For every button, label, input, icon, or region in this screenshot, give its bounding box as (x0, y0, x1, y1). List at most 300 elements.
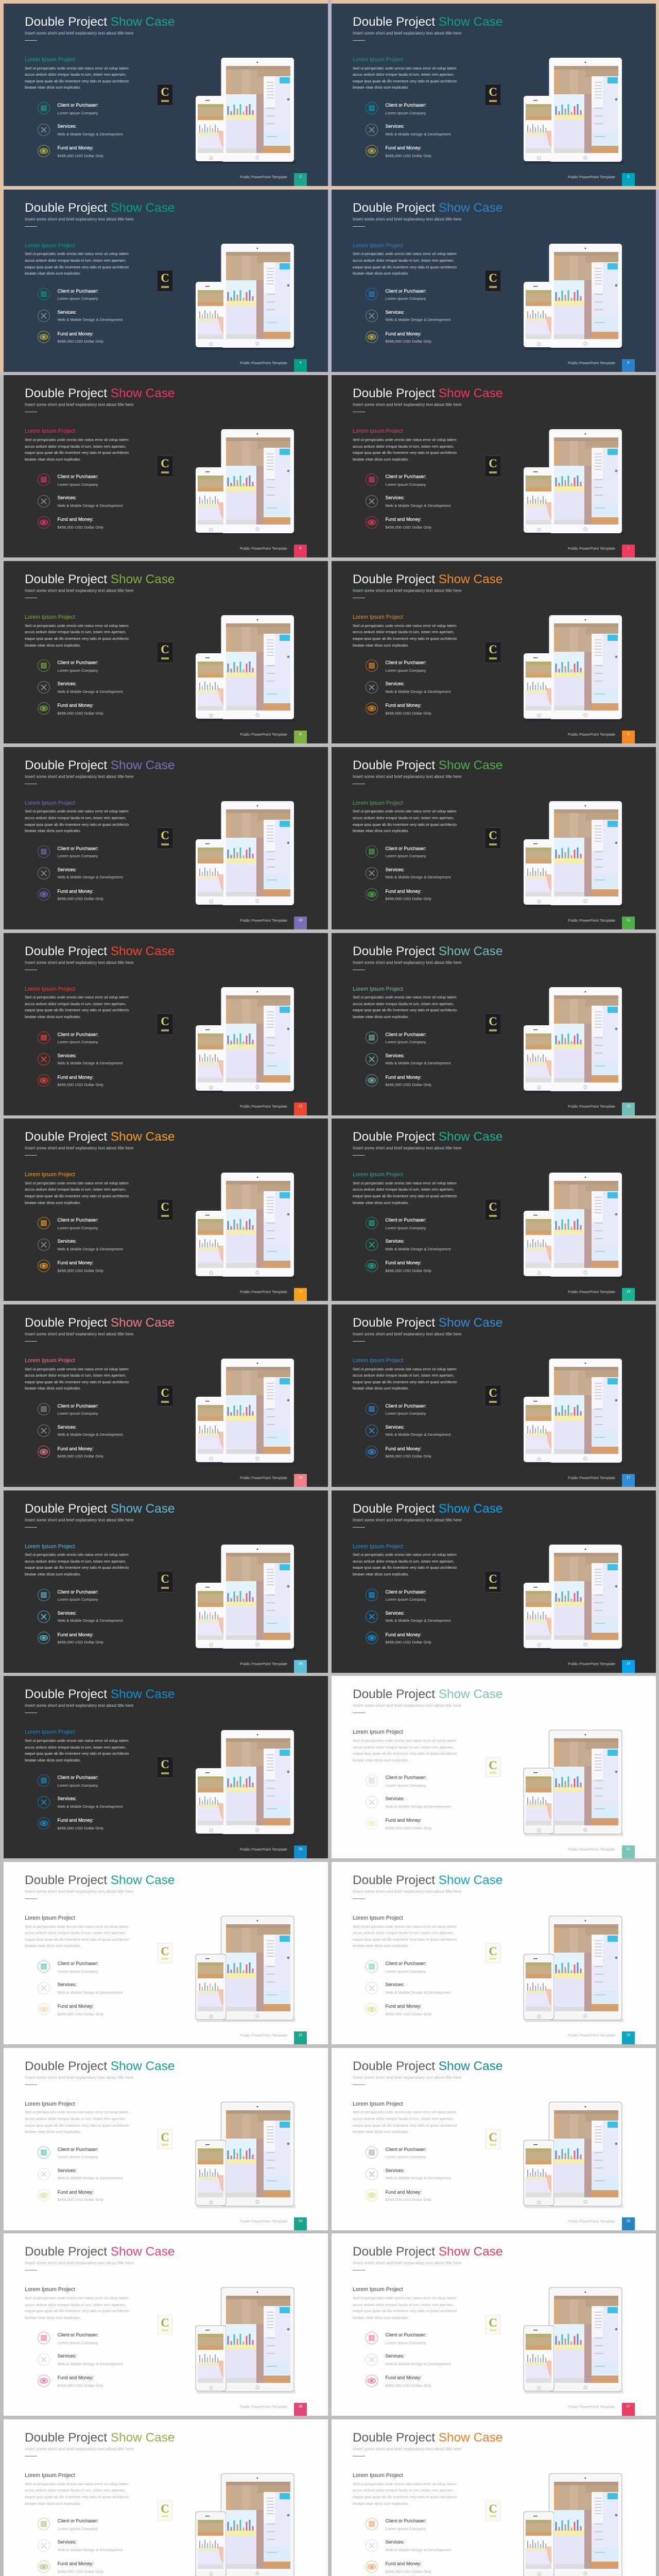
client text: Client or Purchaser: (385, 289, 426, 294)
footer: Public PowerPoint Template (240, 1662, 287, 1666)
client text: Client or Purchaser: (58, 289, 98, 294)
footer: Public PowerPoint Template (240, 1476, 287, 1480)
icon: fund (37, 888, 50, 901)
logo (485, 1199, 500, 1221)
icon: client (365, 1402, 378, 1416)
icon: services (365, 1795, 378, 1809)
text block (25, 623, 129, 649)
services text (58, 1981, 123, 1996)
text block: eaque ipsa quae ab illo inventore very tatis et quasi architecto (353, 450, 457, 455)
client text: Lorem Ipsum Company (385, 2155, 426, 2159)
client text: Lorem Ipsum Company (58, 668, 98, 673)
services text (58, 1609, 123, 1625)
text block: accus antium dolor emque lauda nt ium, totam rem aperiam, (25, 1373, 126, 1378)
device mockup (518, 798, 627, 911)
panel: slide 16 (3, 1304, 328, 1487)
device mockup (190, 1541, 299, 1654)
services text (58, 2167, 123, 2182)
icon: client (37, 1030, 50, 1044)
text block (25, 1366, 129, 1392)
services text: Services: (385, 1425, 405, 1430)
services text (385, 124, 451, 136)
device mockup (190, 2284, 299, 2397)
text block (25, 437, 129, 462)
logo (485, 2315, 500, 2334)
footer: Public PowerPoint Template (240, 546, 287, 551)
services text: Services: (58, 681, 77, 686)
device mockup (518, 1541, 627, 1654)
services text (58, 1423, 123, 1439)
icon: client (365, 1030, 378, 1044)
services text (58, 1052, 123, 1067)
page number: 23 (627, 2033, 630, 2037)
panel: slide 27 (332, 2233, 656, 2416)
text block (25, 1180, 129, 1206)
title: Double Project Show Case (353, 1687, 502, 1701)
services text (385, 1238, 450, 1253)
page number (622, 173, 635, 186)
icon: fund (365, 702, 378, 715)
services text: Web & Mobile Design & Development (385, 1618, 450, 1623)
client text: Client or Purchaser: (58, 660, 98, 665)
logo (158, 1943, 172, 1963)
fund text: $456,000 USD Dollar Only (385, 525, 431, 530)
icon: client (366, 102, 378, 114)
fund text: Fund and Money: (58, 1818, 94, 1823)
services text: Services: (58, 1425, 77, 1430)
services text: Services: (385, 495, 405, 500)
panel: slide 28 (3, 2419, 328, 2576)
fund text: Fund and Money: (385, 1446, 422, 1451)
services text: Web & Mobile Design & Development (58, 1618, 123, 1623)
fund text: $456,000 USD Dollar Only (385, 711, 431, 716)
page number (622, 2217, 635, 2230)
page number (622, 2031, 635, 2044)
services text: Services: (385, 1796, 405, 1801)
text block: beatae vitae dicta sunt explicabo. (25, 2129, 81, 2134)
services text (58, 1238, 123, 1253)
icon: client (38, 102, 50, 114)
title: Double Project Show Case (353, 2245, 502, 2259)
services text: Web & Mobile Design & Development (58, 132, 123, 136)
logo: C (489, 2316, 497, 2329)
services text: Web & Mobile Design & Development (58, 875, 123, 879)
icon: client (365, 2517, 378, 2531)
panel: slide 14 (3, 1118, 328, 1301)
fund text: Fund and Money: (385, 2004, 422, 2009)
page number (294, 1474, 307, 1487)
fund text: $456,000 USD Dollar Only (385, 2011, 431, 2016)
text block (353, 1924, 457, 1950)
subtitle: Insert some short and brief explanatory text about title here (25, 960, 133, 964)
text block: eaque ipsa quae ab illo inventore very tatis et quasi architecto (25, 2123, 129, 2128)
client text: Lorem Ipsum Company (58, 1411, 98, 1416)
text block (353, 2109, 457, 2136)
subtitle: Insert some short and brief explanatory text about title here (353, 960, 461, 964)
services text (58, 2538, 123, 2554)
text block: eaque ipsa quae ab illo inventore very tatis et quasi architecto (353, 1380, 457, 1384)
text block (25, 2481, 129, 2507)
text block: beatae vitae dicta sunt explicabo. (353, 2129, 409, 2134)
text block (25, 2109, 129, 2136)
services text: Web & Mobile Design & Development (58, 317, 123, 322)
fund text: $456,000 USD Dollar Only (385, 1454, 431, 1459)
text block: eaque ipsa quae ab illo inventore very tatis et quasi architecto (353, 1751, 457, 1756)
fund text: $456,000 USD Dollar Only (385, 2569, 431, 2574)
logo: C (489, 1200, 497, 1213)
subtitle: Insert some short and brief explanatory text about title here (25, 2075, 133, 2080)
heading: Lorem Ipsum Project (353, 428, 403, 434)
text block: Sed ut perspiciatis unde omnis iste natus error sit volup tatem (353, 1181, 457, 1185)
title: Double Project Show Case (353, 944, 502, 958)
icon: client (366, 288, 378, 300)
logo: C (489, 86, 497, 98)
client text: Lorem Ipsum Company (58, 854, 98, 858)
fund text: $456,000 USD Dollar Only (58, 2383, 103, 2388)
client text: Lorem Ipsum Company (385, 668, 426, 673)
page number: 9 (628, 733, 629, 736)
fund text: Fund and Money: (58, 2561, 94, 2566)
client text: Lorem Ipsum Company (58, 2527, 98, 2531)
services text (385, 680, 450, 696)
page number (294, 545, 307, 557)
page number: 16 (299, 1476, 302, 1480)
fund text: $456,000 USD Dollar Only (58, 2197, 103, 2202)
device mockup (190, 2470, 299, 2576)
text block (353, 1180, 457, 1206)
icon: fund (38, 331, 50, 343)
page number: 11 (627, 919, 630, 922)
subtitle: Insert some short and brief explanatory text about title here (25, 2261, 133, 2265)
services text: Services: (385, 2539, 405, 2545)
logo (158, 827, 172, 849)
panel: slide 24 (3, 2048, 328, 2230)
logo (485, 1943, 500, 1963)
icon: services (37, 1052, 50, 1065)
text block: accus antium dolor emque lauda nt ium, totam rem aperiam, (25, 816, 126, 820)
page number (294, 917, 307, 929)
client text (385, 1774, 426, 1789)
title: Double Project Show Case (25, 944, 175, 958)
services text: Web & Mobile Design & Development (385, 2548, 450, 2552)
page number: 21 (627, 1848, 630, 1851)
text block: beatae vitae dicta sunt explicabo. (353, 1014, 409, 1019)
title: Double Project Show Case (353, 1502, 502, 1516)
client text: Client or Purchaser: (58, 1217, 98, 1223)
text block: accus antium dolor emque lauda nt ium, totam rem aperiam, (353, 1745, 454, 1750)
heading: Lorem Ipsum Project (353, 1915, 403, 1921)
text block (353, 623, 457, 649)
heading: Lorem Ipsum Project (25, 57, 75, 63)
fund text: Fund and Money: (385, 2561, 422, 2566)
services text: Web & Mobile Design & Development (58, 1061, 123, 1065)
services text: Services: (385, 124, 405, 129)
icon: services (365, 1238, 378, 1251)
client text: Client or Purchaser: (58, 846, 98, 851)
client text: Lorem Ipsum Company (58, 1226, 98, 1230)
text block: accus antium dolor emque lauda nt ium, totam rem aperiam, (353, 816, 454, 820)
logo (485, 1757, 500, 1777)
device mockup (518, 2098, 627, 2212)
text block: Sed ut perspiciatis unde omnis iste natus error sit volup tatem (25, 2296, 129, 2300)
client text: Lorem Ipsum Company (385, 1226, 426, 1230)
text block (25, 994, 129, 1021)
text block: beatae vitae dicta sunt explicabo. (353, 2315, 409, 2320)
logo: C (161, 2131, 169, 2144)
fund text: $456,000 USD Dollar Only (385, 1640, 431, 1645)
client text: Client or Purchaser: (385, 1961, 426, 1966)
page number (294, 1845, 307, 1858)
services text: Services: (58, 867, 77, 872)
text block: accus antium dolor emque lauda nt ium, totam rem aperiam, (25, 2302, 126, 2307)
icon: client (37, 1960, 50, 1973)
text block (25, 1552, 129, 1578)
fund text: Fund and Money: (58, 1632, 94, 1637)
client text (58, 1774, 98, 1789)
text block: eaque ipsa quae ab illo inventore very tatis et quasi architecto (353, 1194, 457, 1198)
fund text (58, 1817, 103, 1832)
text block: beatae vitae dicta sunt explicabo. (353, 1758, 409, 1762)
icon: fund (37, 2003, 50, 2016)
footer: Public PowerPoint Template (568, 2219, 615, 2224)
fund text: $456,000 USD Dollar Only (58, 525, 103, 530)
footer: Public PowerPoint Template (240, 1290, 287, 1294)
client text: Lorem Ipsum Company (58, 2155, 98, 2159)
services text (58, 124, 123, 136)
client text: Client or Purchaser: (58, 1403, 98, 1409)
client text: Client or Purchaser: (385, 2147, 426, 2152)
text block (353, 437, 457, 463)
fund text (385, 145, 431, 158)
client text: Client or Purchaser: (385, 846, 426, 851)
subtitle: Insert some short and brief explanatory text about title here (353, 2261, 461, 2265)
panel: slide 12 (3, 933, 328, 1115)
logo (158, 1013, 172, 1035)
text block: eaque ipsa quae ab illo inventore very tatis et quasi architecto (25, 2495, 129, 2499)
panel: slide 23 (332, 1862, 656, 2044)
services text (58, 494, 123, 510)
device mockup (518, 2470, 627, 2576)
fund text: $456,000 USD Dollar Only (58, 339, 103, 344)
page number: 18 (299, 1662, 302, 1666)
device mockup (190, 612, 299, 725)
heading: Lorem Ipsum Project (353, 986, 403, 992)
icon: client (37, 1216, 50, 1230)
text block: Sed ut perspiciatis unde omnis iste natus error sit volup tatem (25, 1924, 129, 1929)
services text: Services: (58, 1239, 77, 1244)
client text: Lorem Ipsum Company (58, 110, 98, 115)
footer: Public PowerPoint Template (568, 1290, 615, 1294)
text block: eaque ipsa quae ab illo inventore very tatis et quasi architecto (353, 1937, 457, 1942)
icon: client (365, 845, 378, 858)
fund text: Fund and Money: (58, 331, 94, 336)
text block: beatae vitae dicta sunt explicabo. (353, 271, 409, 276)
client text (385, 473, 426, 488)
client text: Client or Purchaser: (385, 474, 426, 479)
footer: Public PowerPoint Template (568, 175, 615, 179)
icon: services (37, 2167, 50, 2181)
heading: Lorem Ipsum Project (25, 2472, 75, 2479)
icon: fund (366, 331, 378, 343)
icon: client (37, 659, 50, 672)
text block: accus antium dolor emque lauda nt ium, totam rem aperiam, (353, 1187, 454, 1192)
icon: fund (365, 888, 378, 901)
logo (158, 2315, 172, 2334)
icon: services (37, 867, 50, 880)
panel: slide 9 (332, 561, 656, 743)
text block: beatae vitae dicta sunt explicabo. (25, 1572, 81, 1577)
icon: client (37, 2331, 50, 2345)
page number: 27 (627, 2405, 630, 2409)
fund text (58, 516, 103, 531)
text block: eaque ipsa quae ab illo inventore very tatis et quasi architecto (25, 1937, 129, 1942)
icon: fund (365, 516, 378, 529)
services text (385, 866, 450, 882)
device mockup (518, 1355, 627, 1468)
logo (158, 641, 172, 663)
services text: Services: (385, 2353, 405, 2359)
fund text (385, 1817, 431, 1832)
fund text: Fund and Money: (58, 889, 94, 894)
footer: Public PowerPoint Template (240, 2219, 287, 2224)
subtitle: Insert some short and brief explanatory text about title here (353, 217, 461, 222)
client text: Client or Purchaser: (58, 1961, 98, 1966)
text block: eaque ipsa quae ab illo inventore very tatis et quasi architecto (25, 822, 129, 827)
text block: Sed ut perspiciatis unde omnis iste natus error sit volup tatem (25, 2482, 129, 2486)
client text (58, 2517, 98, 2533)
logo: C (489, 2502, 497, 2515)
client text: Lorem Ipsum Company (385, 1969, 426, 1973)
services text: Web & Mobile Design & Development (385, 503, 450, 508)
text block: eaque ipsa quae ab illo inventore very tatis et quasi architecto (353, 822, 457, 827)
heading: Lorem Ipsum Project (353, 243, 403, 249)
text block: Sed ut perspiciatis unde omnis iste natus error sit volup tatem (353, 1367, 457, 1371)
text block: eaque ipsa quae ab illo inventore very tatis et quasi architecto (353, 265, 457, 269)
text block (353, 808, 457, 835)
device mockup (524, 58, 623, 164)
logo: C (161, 643, 169, 656)
logo (485, 455, 500, 477)
text block: Sed ut perspiciatis unde omnis iste natus error sit volup tatem (353, 1738, 457, 1743)
client text: Lorem Ipsum Company (385, 2341, 426, 2345)
fund text (58, 1631, 103, 1647)
icon: services (365, 1981, 378, 1995)
text block: Sed ut perspiciatis unde omnis iste natus error sit volup tatem (25, 66, 129, 71)
text block: accus antium dolor emque lauda nt ium, totam rem aperiam, (25, 630, 126, 634)
fund text (58, 2374, 103, 2389)
services text (385, 2352, 450, 2368)
icon: client (37, 2146, 50, 2159)
fund text: $456,000 USD Dollar Only (58, 2569, 103, 2574)
icon: fund (365, 1817, 378, 1830)
text block (353, 994, 457, 1021)
heading: Lorem Ipsum Project (25, 428, 75, 434)
subtitle: Insert some short and brief explanatory text about title here (25, 1703, 133, 1708)
heading: Lorem Ipsum Project (25, 1544, 75, 1550)
text block: accus antium dolor emque lauda nt ium, totam rem aperiam, (353, 444, 454, 449)
logo: C (161, 2502, 169, 2515)
text block: accus antium dolor emque lauda nt ium, totam rem aperiam, (25, 1930, 126, 1935)
services text: Services: (58, 2539, 77, 2545)
page number (622, 1103, 635, 1115)
icon: fund (37, 1259, 50, 1273)
client text (385, 2146, 426, 2161)
client text: Lorem Ipsum Company (385, 1597, 426, 1602)
title: Double Project Show Case (353, 386, 502, 400)
title: Double Project Show Case (353, 1130, 502, 1144)
title: Double Project Show Case (25, 2059, 175, 2073)
icon: services (37, 681, 50, 694)
panel: slide 29 (332, 2419, 656, 2576)
icon: services (365, 1052, 378, 1065)
page number: 6 (300, 547, 301, 550)
icon: fund (37, 1631, 50, 1645)
text block: accus antium dolor emque lauda nt ium, totam rem aperiam, (25, 258, 126, 263)
fund text (385, 2374, 431, 2389)
text block: Sed ut perspiciatis unde omnis iste natus error sit volup tatem (25, 437, 129, 442)
fund text: $456,000 USD Dollar Only (58, 154, 103, 158)
client text: Client or Purchaser: (58, 1589, 98, 1595)
icon: services (37, 1981, 50, 1995)
client text: Lorem Ipsum Company (385, 482, 426, 487)
logo: C (161, 1945, 169, 1958)
icon: services (365, 495, 378, 508)
text block (25, 808, 129, 835)
services text: Web & Mobile Design & Development (58, 689, 123, 694)
page number: 22 (299, 2033, 302, 2037)
icon: fund (365, 1074, 378, 1087)
fund text: $456,000 USD Dollar Only (385, 896, 431, 901)
text block: beatae vitae dicta sunt explicabo. (25, 1386, 81, 1391)
heading: Lorem Ipsum Project (25, 1729, 75, 1735)
fund text: Fund and Money: (385, 1632, 422, 1637)
fund text (385, 1259, 431, 1275)
text block: eaque ipsa quae ab illo inventore very tatis et quasi architecto (353, 1565, 457, 1570)
text block: eaque ipsa quae ab illo inventore very tatis et quasi architecto (25, 636, 129, 641)
subtitle: Insert some short and brief explanatory text about title here (353, 2447, 461, 2451)
panel: slide 21 (332, 1676, 656, 1858)
icon: fund (365, 1445, 378, 1459)
page number: 14 (299, 1290, 302, 1294)
logo: C (489, 1759, 497, 1772)
client text (385, 1030, 426, 1046)
footer: Public PowerPoint Template (240, 2404, 287, 2409)
client text (58, 289, 98, 301)
logo: C (161, 457, 169, 470)
logo: C (161, 1572, 169, 1585)
services text: Web & Mobile Design & Development (58, 1804, 123, 1809)
text block: Sed ut perspiciatis unde omnis iste natus error sit volup tatem (353, 995, 457, 999)
services text: Web & Mobile Design & Development (385, 317, 450, 322)
icon: fund (37, 516, 50, 529)
icon: services (365, 1424, 378, 1437)
fund text: $456,000 USD Dollar Only (385, 1268, 431, 1273)
text block: accus antium dolor emque lauda nt ium, totam rem aperiam, (25, 444, 126, 449)
client text: Lorem Ipsum Company (385, 296, 426, 301)
logo (485, 2129, 500, 2149)
text block: Sed ut perspiciatis unde omnis iste natus error sit volup tatem (353, 251, 457, 256)
logo (485, 84, 500, 106)
services text: Services: (58, 1611, 77, 1616)
client text: Client or Purchaser: (385, 2332, 426, 2337)
fund text: $456,000 USD Dollar Only (385, 2383, 431, 2388)
text block (353, 66, 457, 90)
fund text (58, 145, 103, 158)
text block: accus antium dolor emque lauda nt ium, totam rem aperiam, (25, 2488, 126, 2493)
icon: client (365, 2146, 378, 2159)
footer: Public PowerPoint Template (568, 546, 615, 551)
text block: eaque ipsa quae ab illo inventore very tatis et quasi architecto (25, 2309, 129, 2313)
